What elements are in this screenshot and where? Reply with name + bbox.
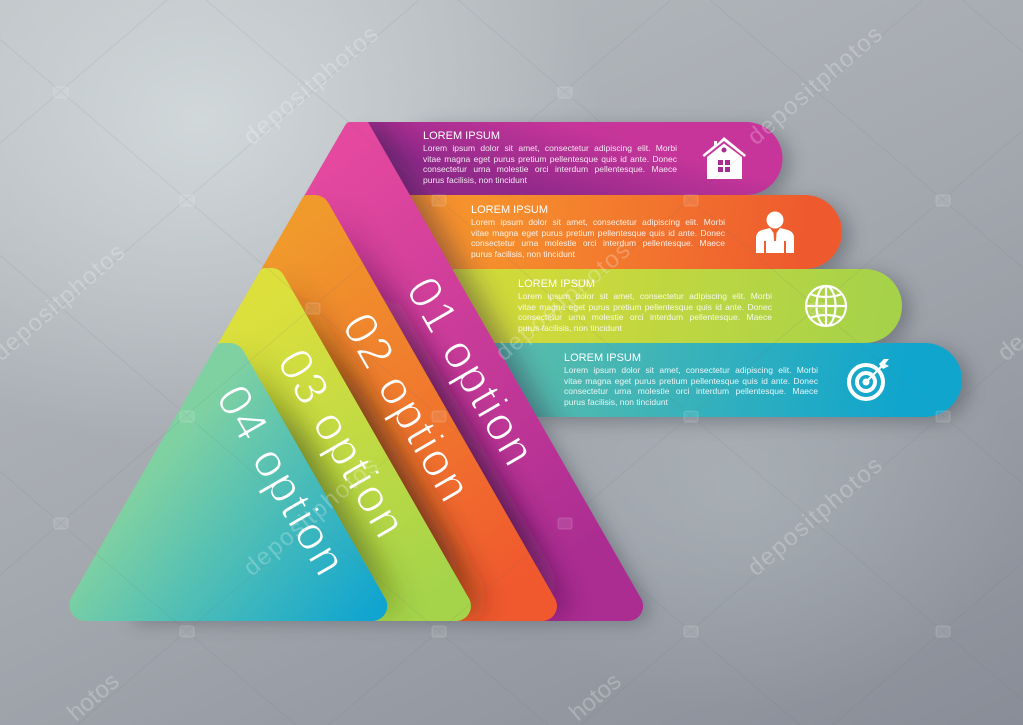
text block 3: LOREM IPSUM xyxy=(518,278,595,290)
text block 4: LOREM IPSUM xyxy=(564,352,641,364)
text block 4 xyxy=(564,352,818,407)
label: 01 option: 01 option xyxy=(396,268,546,474)
icon: globe xyxy=(806,286,846,326)
slab 04: teal xyxy=(69,343,387,621)
ribbon 4: teal xyxy=(355,343,962,417)
label: 04 option: 04 option xyxy=(206,376,357,584)
text block 1: LOREM IPSUM xyxy=(423,130,500,142)
slab shadow on ribbons xyxy=(368,122,566,417)
text block 3 xyxy=(518,278,772,333)
text block 4: Lorem ipsum dolor sit amet, consectetur adipiscing elit. Morbi xyxy=(564,365,818,375)
text block 3: vitae magna eget purus pretium pellentesque quis id ante. Donec xyxy=(518,302,772,312)
pyramid and ribbons graphic xyxy=(69,118,976,631)
text block 2 xyxy=(471,204,725,259)
text block 2: Lorem ipsum dolor sit amet, consectetur adipiscing elit. Morbi xyxy=(471,217,725,227)
text block 3: Lorem ipsum dolor sit amet, consectetur adipiscing elit. Morbi xyxy=(518,291,772,301)
watermark overlay: depositphotos xyxy=(490,237,635,367)
icon: target xyxy=(849,359,889,399)
slab 01: magenta xyxy=(69,122,643,621)
slab 02 inner shadow xyxy=(289,284,496,621)
soft shadows on background xyxy=(130,127,970,623)
ribbon 2: orange xyxy=(355,195,842,269)
text block 4: vitae magna eget purus pretium pellentesque quis id ante. Donec xyxy=(564,376,818,386)
label: 02 option: 02 option xyxy=(332,304,482,510)
watermark overlay: depositphotos xyxy=(742,452,887,582)
icon: businessman xyxy=(756,212,794,253)
text block 4: purus facilisis, non tincidunt xyxy=(564,397,668,407)
text block 1: consectetur urna molestie orci interdum pellentesque. Maece xyxy=(423,164,677,174)
label: 03 option: 03 option xyxy=(267,340,417,546)
text block 4: consectetur urna molestie orci interdum pellentesque. Maece xyxy=(564,386,818,396)
text block 2: consectetur urna molestie orci interdum pellentesque. Maece xyxy=(471,238,725,248)
ribbon 3: lime xyxy=(355,269,902,343)
text block 2: LOREM IPSUM xyxy=(471,204,548,216)
watermark overlay: hotos xyxy=(62,668,124,725)
slab 01 inner shadow xyxy=(334,212,578,621)
text block 3: consectetur urna molestie orci interdum pellentesque. Maece xyxy=(518,312,772,322)
text block 2: purus facilisis, non tincidunt xyxy=(471,249,575,259)
slab 02: orange xyxy=(69,195,557,621)
text block 1 xyxy=(423,130,677,185)
ribbon 1: magenta xyxy=(355,122,782,195)
watermark overlay: depositphotos xyxy=(238,21,383,151)
text block 2: vitae magna eget purus pretium pellentesque quis id ante. Donec xyxy=(471,228,725,238)
icon: house xyxy=(702,137,746,179)
slab 03 inner shadow xyxy=(245,354,406,621)
text block 1: vitae magna eget purus pretium pellentesque quis id ante. Donec xyxy=(423,154,677,164)
text block 3: purus facilisis, non tincidunt xyxy=(518,323,622,333)
slab 03: lime xyxy=(69,268,471,621)
text block 1: Lorem ipsum dolor sit amet, consectetur adipiscing elit. Morbi xyxy=(423,143,677,153)
text block 1: purus facilisis, non tincidunt xyxy=(423,175,527,185)
watermark overlay: hotos xyxy=(564,668,626,725)
watermark overlay: depositphotos xyxy=(742,21,887,151)
watermark overlay: depositphotos xyxy=(238,452,383,582)
